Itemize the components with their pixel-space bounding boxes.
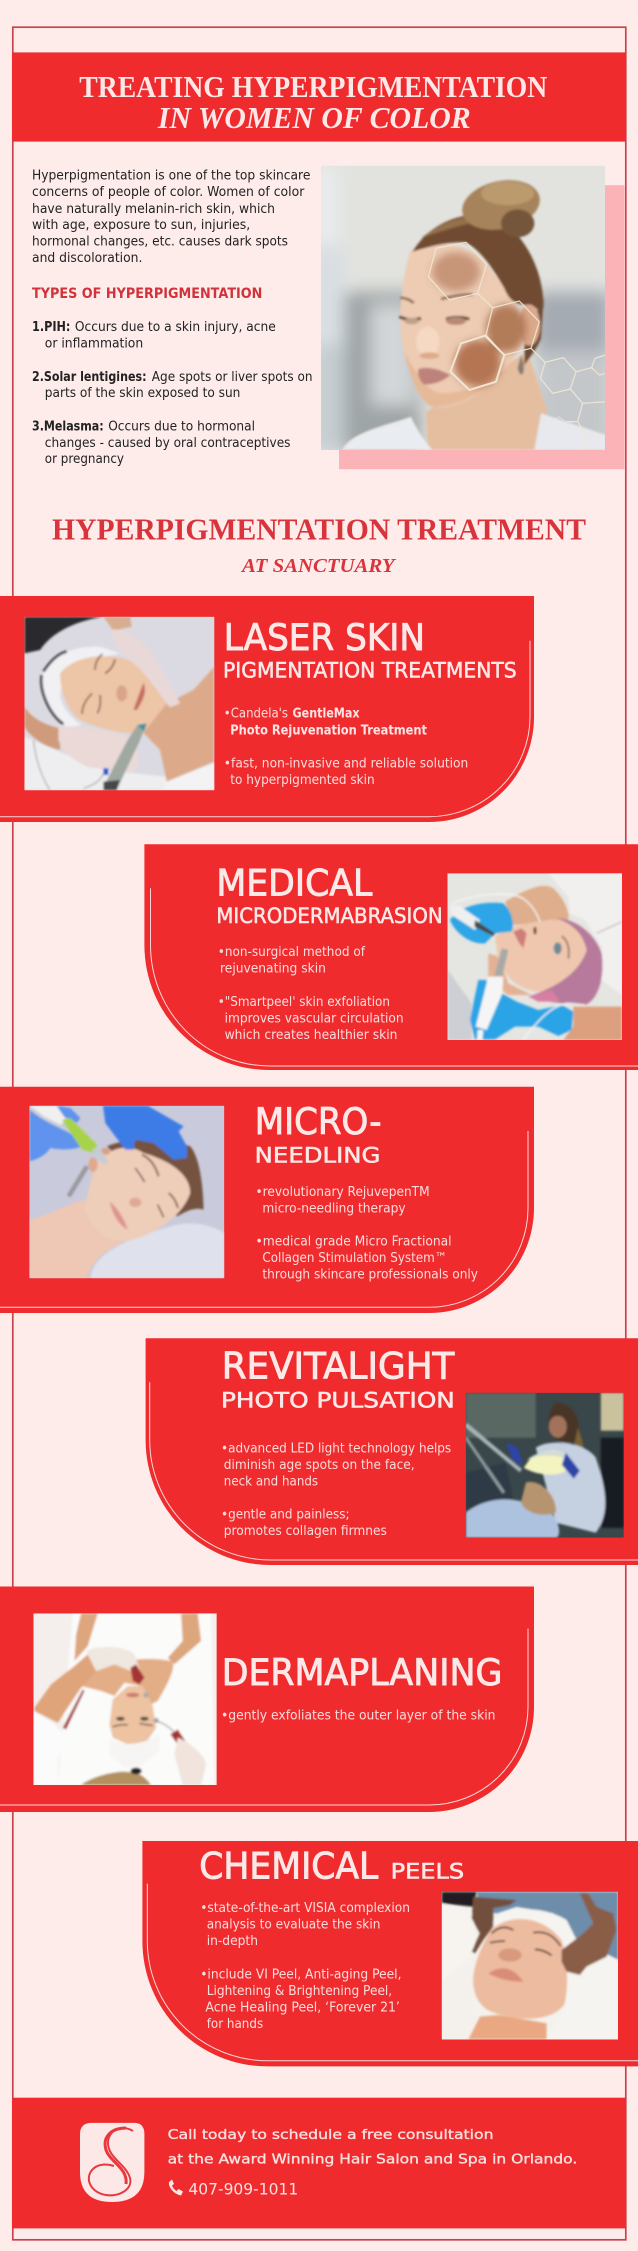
heading: medical microdermabrasion: MEDICAL [216, 862, 373, 905]
bullets: medical microdermabrasion: •"Smartpeel' skin exfoliation [218, 995, 390, 1010]
bullets: laser skin: Photo Rejuvenation Treatment [230, 723, 427, 738]
contact text: Call today to schedule a free consultation [168, 2127, 494, 2143]
bullets: chemical peels: Lightening & Brightening Peel, [207, 1984, 392, 1999]
heading: revitalight photo pulsation: PHOTO PULSATION [221, 1388, 455, 1412]
bullets: laser skin: to hyperpigmented skin [230, 773, 375, 788]
list: types of hyperpigmentation: Occurs due to hormonal [108, 420, 255, 434]
title banner [12, 52, 626, 142]
heading: chemical peels: CHEMICAL [199, 1844, 379, 1887]
list: types of hyperpigmentation: 2.Solar lentigines: [32, 370, 146, 385]
photo: laser treatment [24, 616, 214, 790]
pink photo backing block [339, 185, 624, 469]
panel: medical microdermabrasion [144, 844, 638, 1070]
bullets: chemical peels [200, 1901, 410, 2032]
heading: dermaplaning: DERMAPLANING [222, 1651, 502, 1694]
list: types of hyperpigmentation: Age spots or liver spots on [152, 370, 312, 385]
bullets: medical microdermabrasion: rejuvenating skin [220, 962, 326, 977]
intro paragraph: with age, exposure to sun, injuries, [32, 218, 250, 233]
bullets: micro-needling: through skincare professionals only [262, 1267, 478, 1282]
list: types of hyperpigmentation: or pregnancy [45, 452, 124, 467]
bullets: revitalight photo pulsation [221, 1441, 451, 1539]
bullets: medical microdermabrasion: •non-surgical method of [218, 945, 365, 960]
bullets: medical microdermabrasion: which creates healthier skin [225, 1028, 398, 1043]
heading: laser skin [223, 616, 517, 683]
heading: revitalight photo pulsation [221, 1344, 455, 1412]
intro paragraph [32, 168, 310, 266]
intro paragraph: hormonal changes, etc. causes dark spots [32, 235, 288, 250]
bullets: chemical peels: •state-of-the-art VISIA complexion [200, 1901, 410, 1916]
bullets: medical microdermabrasion: improves vascular circulation [225, 1011, 404, 1026]
panel: laser skin [0, 596, 534, 822]
heading: medical microdermabrasion [216, 862, 443, 928]
list: types of hyperpigmentation: parts of the skin exposed to sun [45, 386, 240, 401]
panel: micro-needling [0, 1087, 534, 1313]
panel: dermaplaning [0, 1586, 534, 1812]
photo: chemical peel [442, 1892, 618, 2040]
list: types of hyperpigmentation: changes - caused by oral contraceptives [45, 436, 291, 451]
heading: chemical peels: PEELS [391, 1859, 464, 1883]
contact text: at the Award Winning Hair Salon and Spa in Orlando. [168, 2151, 577, 2167]
title line 1: TREATING HYPERPIGMENTATION [79, 69, 547, 104]
list: types of hyperpigmentation: 1.PIH: [32, 320, 70, 335]
photo: microdermabrasion [448, 873, 622, 1040]
photo: micro-needling [29, 1106, 224, 1278]
list: types of hyperpigmentation: Occurs due to a skin injury, acne [75, 320, 276, 335]
heading: medical microdermabrasion: MICRODERMABRASION [216, 904, 443, 928]
heading: laser skin: LASER SKIN [224, 616, 425, 659]
subheading: at sanctuary: AT SANCTUARY [240, 555, 396, 577]
photo: dermaplaning [33, 1613, 217, 1785]
bullets: revitalight photo pulsation: neck and hands [224, 1474, 318, 1489]
bullets: chemical peels: analysis to evaluate the skin [207, 1918, 380, 1933]
phone number: 407-909-1011 [188, 2180, 298, 2198]
bullets: chemical peels: •include VI Peel, Anti-aging Peel, [200, 1968, 402, 1983]
bullets: micro-needling [256, 1185, 478, 1282]
bullets: revitalight photo pulsation: diminish age spots on the face, [224, 1458, 415, 1473]
intro paragraph: concerns of people of color. Women of color [32, 185, 305, 200]
bullets: laser skin [224, 707, 468, 788]
bullets: chemical peels: Acne Healing Peel, ‘Forever 21’ [205, 2001, 400, 2016]
list: types of hyperpigmentation: or inflammation [45, 336, 143, 352]
contact text [168, 2127, 577, 2167]
intro paragraph: Hyperpigmentation is one of the top skincare [32, 168, 310, 184]
panel: chemical peels [142, 1841, 638, 2066]
bullets: micro-needling: Collagen Stimulation System™ [262, 1251, 447, 1266]
heading: hyperpigmentation treatment: HYPERPIGMENTATION TREATMENT [52, 512, 586, 547]
icon: phone [169, 2180, 183, 2196]
heading: revitalight photo pulsation: REVITALIGHT [222, 1344, 455, 1387]
bullets: laser skin: •Candela's [224, 707, 288, 722]
bullets: laser skin: GentleMax [292, 707, 360, 722]
bullets: micro-needling: •revolutionary RejuvepenTM [256, 1185, 430, 1200]
heading: micro-needling [255, 1100, 382, 1167]
logo: S monogram [80, 2123, 144, 2202]
list: types of hyperpigmentation: 3.Melasma: [32, 420, 104, 434]
bullets: medical microdermabrasion [218, 945, 404, 1043]
bullets: micro-needling: •medical grade Micro Fractional [256, 1234, 452, 1249]
bullets: micro-needling: micro-needling therapy [262, 1201, 406, 1216]
bullets: chemical peels: in-depth [207, 1934, 258, 1949]
bullets: laser skin: •fast, non-invasive and reliable solution [224, 757, 468, 772]
photo: woman with dark spots and hexagons [321, 166, 605, 450]
heading: micro-needling: NEEDLING [255, 1143, 380, 1167]
list: types of hyperpigmentation [32, 320, 312, 467]
bullets: revitalight photo pulsation: •advanced LED light technology helps [221, 1441, 451, 1456]
bullets: chemical peels: for hands [207, 2017, 263, 2032]
panel: revitalight photo pulsation [146, 1338, 638, 1565]
intro paragraph: and discoloration. [32, 251, 142, 266]
heading: laser skin: PIGMENTATION TREATMENTS [223, 659, 517, 683]
photo: revitalight treatment [466, 1392, 624, 1538]
footer banner [12, 2098, 626, 2228]
bullets: revitalight photo pulsation: promotes collagen firmnes [224, 1524, 387, 1539]
heading: types of hyperpigmentation: TYPES OF HYPERPIGMENTATION [32, 285, 262, 302]
bullet: dermaplaning: •gently exfoliates the outer layer of the skin [221, 1708, 496, 1723]
intro paragraph: have naturally melanin-rich skin, which [32, 202, 275, 217]
bullets: revitalight photo pulsation: •gentle and painless; [221, 1507, 350, 1522]
title line 2: IN WOMEN OF COLOR [157, 100, 471, 135]
heading: micro-needling: MICRO- [255, 1100, 382, 1143]
